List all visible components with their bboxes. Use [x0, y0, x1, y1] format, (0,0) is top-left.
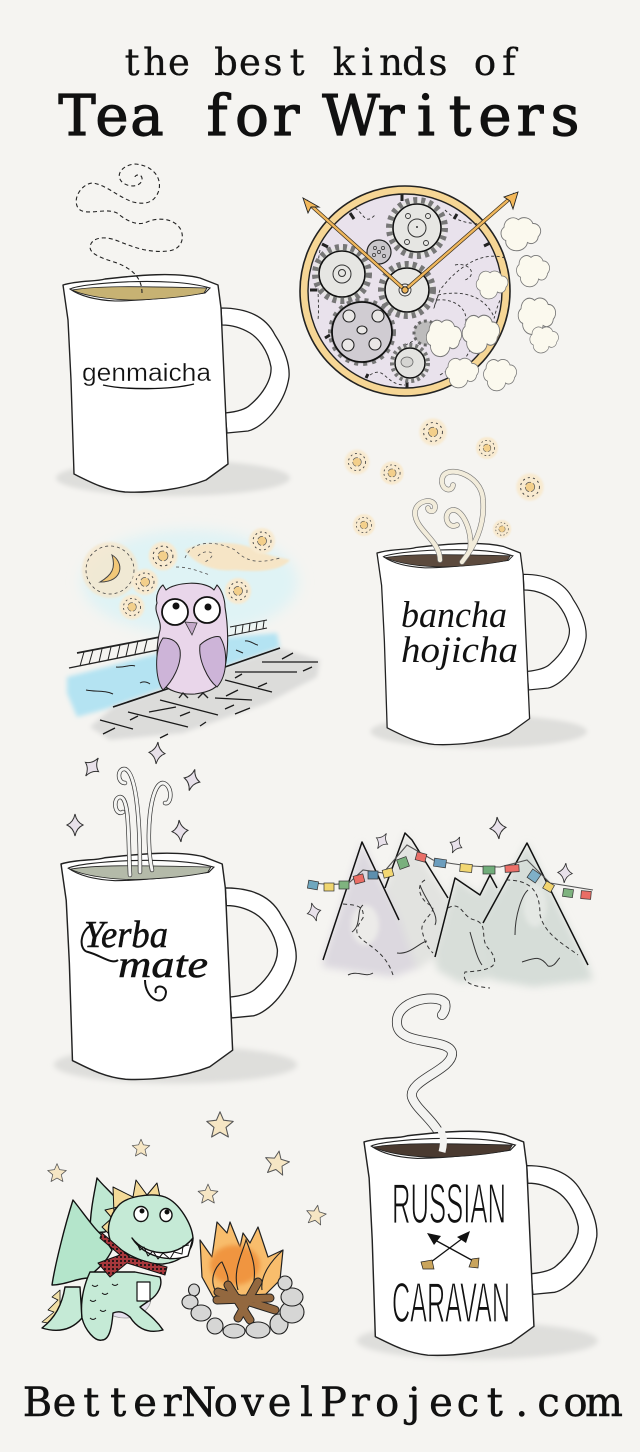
gear: small bottom: [392, 345, 428, 381]
gear: top: [389, 200, 445, 256]
owl eyes: [162, 599, 188, 625]
swirl wash: [185, 543, 290, 571]
walkway planks: [100, 648, 318, 738]
mug: russian caravan: [357, 999, 598, 1359]
steam: cream curls: [415, 472, 483, 562]
mug: russian caravan: RUSSIAN: [392, 1172, 506, 1236]
gear: small dark: [414, 321, 438, 345]
mountain outlines: [323, 833, 588, 965]
clock hands: [303, 192, 518, 293]
wings: [90, 1178, 120, 1233]
dashed circuit lines: [318, 208, 505, 385]
label: yerba mate: [84, 914, 208, 986]
swirl lines: [176, 543, 280, 575]
title: the best kinds of: [125, 41, 518, 84]
head spikes: [102, 1180, 160, 1240]
water: [67, 633, 280, 717]
flames: [200, 1222, 283, 1297]
trails: [343, 880, 578, 988]
eyes: [134, 1206, 148, 1222]
label: yerba mate: mate: [118, 944, 208, 986]
label: bancha hojicha: [401, 595, 518, 671]
railing: [69, 620, 267, 694]
gold stars: [48, 1112, 327, 1226]
mug: genmaicha: [56, 164, 290, 496]
label: russian caravan: [392, 1172, 510, 1335]
label: bancha hojicha: bancha: [401, 595, 507, 636]
popcorn puffs: [426, 218, 558, 391]
crossed arrows: [421, 1231, 479, 1269]
sparkles: [305, 816, 573, 923]
tea: yerba: [70, 866, 211, 880]
body: [81, 1272, 163, 1340]
mug: yerba mate: [54, 741, 297, 1083]
dragon: [42, 1178, 193, 1340]
gear: left: [315, 247, 369, 301]
body scales: [90, 1284, 118, 1320]
steam: dashed: [76, 164, 182, 293]
label: bancha hojicha: hojicha: [401, 630, 518, 671]
title: Tea for Writers: [58, 84, 579, 149]
tick marks: [310, 194, 490, 388]
owl scene: [67, 528, 320, 740]
owl: [156, 583, 228, 698]
tea: bancha: [385, 555, 510, 567]
cup: [137, 1282, 150, 1301]
steam: base: [440, 1128, 443, 1152]
mountain highlights: [351, 905, 379, 945]
tea: genmaicha: [72, 287, 207, 300]
tea: russian caravan: [373, 1144, 512, 1157]
gear: small top: [367, 240, 391, 264]
golden specks: [345, 418, 544, 538]
scarf: [98, 1233, 167, 1277]
owl beak: [185, 622, 197, 635]
prayer flags: [307, 852, 591, 899]
sparkles: [67, 741, 203, 843]
title: [58, 41, 579, 149]
label curls: [82, 925, 166, 1001]
clock with gears: [300, 186, 558, 396]
tail: [42, 1287, 82, 1330]
campfire: [182, 1222, 304, 1338]
steam: s-curve: [397, 999, 452, 1152]
label: yerba mate: Yerba: [84, 914, 168, 956]
stars and moon: [82, 528, 275, 619]
head: [108, 1195, 193, 1264]
mouth: [132, 1238, 193, 1259]
mountain washes: [323, 833, 593, 987]
clock face: [300, 186, 510, 396]
gear: center: [381, 264, 433, 316]
belly: [99, 1278, 151, 1318]
walkway: [90, 648, 320, 740]
logs: [217, 1282, 275, 1320]
owl wings: [157, 638, 180, 690]
gear: large bottom left: [330, 300, 394, 364]
steam: thin curls: [115, 769, 170, 875]
label: genmaicha: genmaicha: [82, 359, 211, 387]
mug: bancha hojicha: [345, 418, 587, 748]
stone ring: [182, 1276, 304, 1338]
sky wash: [82, 530, 298, 634]
mountains with prayer flags: [305, 816, 593, 988]
bunting string: [308, 845, 593, 890]
dragon and campfire: [42, 1112, 327, 1340]
owl feet: [179, 693, 208, 698]
tail spikes: [42, 1290, 60, 1325]
footer url: BetterNovelProject.com: [23, 1380, 623, 1426]
